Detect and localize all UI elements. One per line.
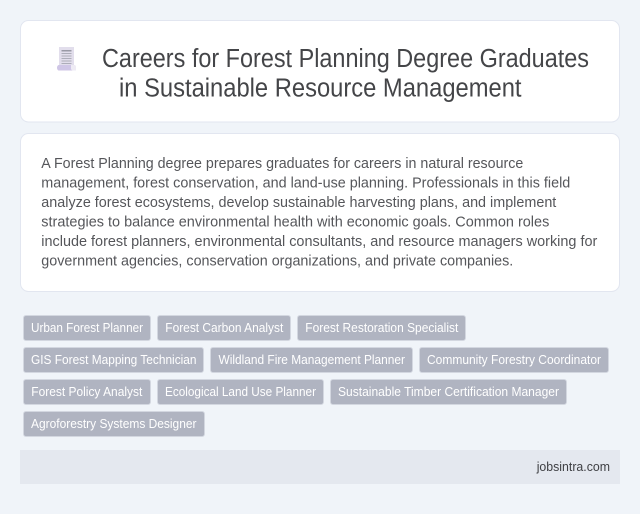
tag: Forest Carbon Analyst: Forest Carbon Analyst [165, 320, 284, 335]
text block: description: management, forest conservation, and land-use planning. Professionals in this field [41, 176, 570, 192]
tag: Ecological Land Use Planner: Ecological Land Use Planner [165, 384, 317, 399]
tag: Forest Carbon Analyst [158, 316, 290, 340]
text block: description: government agencies, conservation organizations, and private companies. [41, 254, 513, 270]
tag: Community Forestry Coordinator: Community Forestry Coordinator [427, 352, 602, 367]
title: Careers for Forest Planning Degree Graduates [102, 45, 589, 73]
tag: Community Forestry Coordinator [420, 348, 608, 372]
footer [20, 450, 620, 484]
text block: description: analyze forest ecosystems, develop sustainable harvesting plans, and implement [41, 195, 556, 211]
title [102, 45, 589, 102]
tag: Forest Policy Analyst [24, 380, 150, 404]
text block: description: include forest planners, environmental consultants, and resource managers working for [41, 234, 597, 250]
tag: GIS Forest Mapping Technician [24, 348, 204, 372]
panel: header [20, 20, 620, 122]
tag: Sustainable Timber Certification Manager [330, 380, 566, 404]
tag: Ecological Land Use Planner [158, 380, 324, 404]
tag: Forest Restoration Specialist [298, 316, 466, 340]
tag: Urban Forest Planner [24, 316, 150, 340]
title: in Sustainable Resource Management [119, 74, 522, 102]
tag: Urban Forest Planner: Urban Forest Planner [31, 320, 144, 335]
tag: Agroforestry Systems Designer [24, 412, 204, 436]
text block: description: A Forest Planning degree prepares graduates for careers in natural resource [41, 156, 523, 172]
tag: Forest Policy Analyst: Forest Policy Analyst [31, 384, 143, 399]
text block: description [41, 156, 597, 270]
tag: Wildland Fire Management Planner: Wildland Fire Management Planner [218, 352, 406, 367]
icon: document scroll [57, 47, 76, 70]
tag: Sustainable Timber Certification Manager: Sustainable Timber Certification Manager [338, 384, 560, 399]
footer text: jobsintra.com [536, 460, 610, 474]
text block: description: strategies to balance environmental health with economic goals. Common roles [41, 214, 549, 230]
tag: Wildland Fire Management Planner [210, 348, 412, 372]
tag: Forest Restoration Specialist: Forest Restoration Specialist [305, 320, 459, 335]
panel: description [20, 134, 620, 292]
career tags [24, 316, 608, 436]
tag: GIS Forest Mapping Technician: GIS Forest Mapping Technician [31, 352, 196, 367]
tag: Agroforestry Systems Designer: Agroforestry Systems Designer [31, 416, 197, 431]
